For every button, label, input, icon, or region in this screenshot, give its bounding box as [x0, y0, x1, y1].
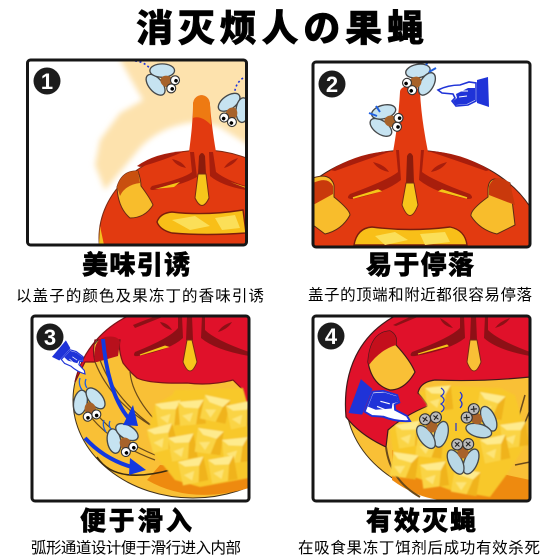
number badge 3	[36, 324, 64, 350]
caption 1: 美味引诱	[82, 250, 190, 280]
caption 3: 便于滑入	[80, 506, 192, 536]
panel 3: sliding in	[30, 314, 250, 502]
fruit fly trap body	[344, 318, 528, 500]
number badge 2	[318, 70, 346, 98]
jelly cubes	[147, 388, 256, 487]
lid	[98, 95, 245, 244]
frame	[313, 62, 530, 247]
number badge 1: 1	[41, 69, 53, 94]
title: 消灭烦人の果蝇	[136, 8, 424, 49]
flies	[134, 62, 245, 128]
jelly cubes	[390, 385, 529, 497]
caption 4: 有效灭蝇	[366, 506, 476, 536]
frame	[32, 316, 249, 501]
hand pointer	[52, 340, 86, 375]
number badge 4: 4	[325, 324, 338, 349]
hand pointer	[438, 77, 489, 107]
number badge 3: 3	[44, 325, 56, 350]
subcaption 2: 盖子的顶端和附近都很容易停落	[308, 286, 532, 304]
number badge 1	[34, 68, 60, 94]
subcaption 1: 以盖子的颜色及果冻丁的香味引诱	[16, 287, 264, 305]
number badge 4	[318, 322, 344, 350]
panel 2: landing	[312, 60, 532, 248]
frame	[313, 316, 530, 501]
fruit fly trap body	[72, 318, 248, 498]
panel 1: attraction	[26, 58, 248, 246]
subcaption 4: 在吸食果冻丁饵剂后成功有效杀死	[298, 539, 540, 557]
lid	[314, 87, 528, 246]
scent glow	[95, 56, 250, 190]
blue arrows	[85, 339, 146, 475]
number badge 2: 2	[326, 72, 338, 97]
flies	[368, 64, 436, 137]
hand pointer	[348, 379, 412, 422]
flies	[72, 378, 139, 457]
panel 4: killing	[312, 314, 532, 502]
frame	[28, 60, 246, 245]
dead flies	[416, 388, 498, 475]
subcaption 3: 弧形通道设计便于滑行进入内部	[31, 539, 241, 557]
caption 2: 易于停落	[366, 250, 474, 280]
